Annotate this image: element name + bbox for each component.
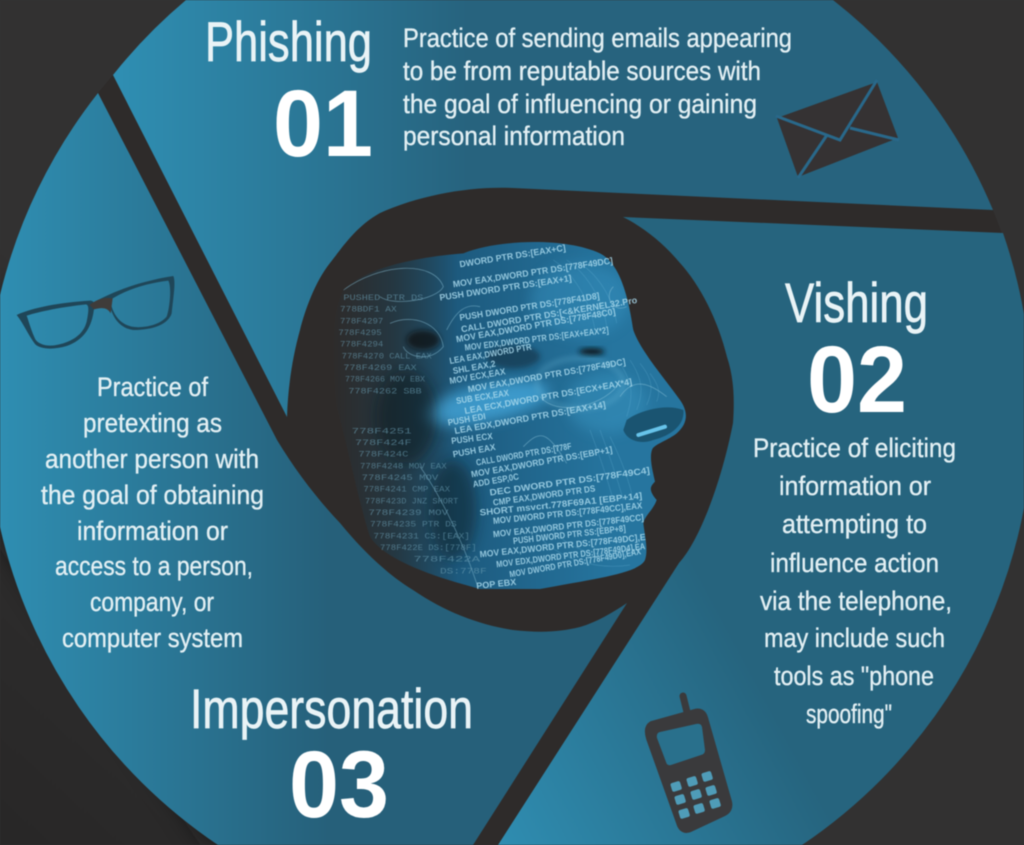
icon: mobile phone bbox=[649, 696, 728, 829]
number: 01: 01 bbox=[273, 71, 373, 177]
text block: vishing description: may include such bbox=[764, 623, 945, 653]
code text overlay: MOV EAX,DWORD PTR DS:[778F48C0] bbox=[455, 306, 616, 344]
dim code on back of head: 778F4235 PTR DS bbox=[370, 520, 457, 530]
dim code on back of head: 778F4294 bbox=[340, 340, 383, 350]
code text overlay: SHORT msvcrt.778F69A1 [EBP+14] bbox=[479, 491, 643, 518]
text block: impersonation description: computer system bbox=[62, 623, 243, 653]
dim code on back of head: 778F4295 bbox=[338, 328, 382, 338]
code text overlay: MOV EAX,DWORD PTR DS:[778F49DC] bbox=[452, 256, 614, 289]
panel: phishing blade bbox=[113, 0, 993, 417]
code text overlay: PUSH DWORD PTR SS:[EBP+8] bbox=[512, 523, 626, 546]
code text overlay: SHL EAX,2 bbox=[452, 359, 496, 376]
text block: phishing description: Practice of sending emails appearing bbox=[403, 23, 792, 53]
text block: impersonation description: company, or bbox=[90, 587, 214, 617]
code text overlay: MOV EAX,DWORD PTR DS:[778F49DC] bbox=[467, 357, 626, 394]
code text overlay: PUSH EAX bbox=[452, 442, 496, 459]
dim code on back of head: 778F4269 EAX bbox=[343, 363, 417, 373]
image: face with code overlay bbox=[338, 242, 686, 590]
text block: impersonation description: pretexting as bbox=[83, 408, 222, 438]
code text overlay: LEA EAX,DWORD PTR bbox=[449, 342, 533, 366]
code text overlay: CALL DWORD PTR DS:[778F bbox=[475, 441, 573, 468]
panel: vishing blade bbox=[498, 217, 1024, 845]
dim code on back of head: DS:778F bbox=[440, 566, 487, 576]
dim code on back of head: 778F424C bbox=[358, 450, 408, 460]
dim code on back of head: PUSHED PTR DS bbox=[343, 293, 423, 303]
dim code on back of head: 778F4248 MOV EAX bbox=[360, 461, 447, 471]
code text overlay: LEA EDX,DWORD PTR DS:[EAX+14] bbox=[454, 399, 606, 436]
dim code on back of head: 778F422A bbox=[413, 555, 480, 565]
code text overlay: POP EBX bbox=[476, 577, 517, 591]
code text overlay: DWORD PTR DS:[EAX+C] bbox=[459, 243, 566, 269]
dim code on back of head: 778F4251 bbox=[352, 426, 412, 436]
code text overlay: MOV ECX,EAX bbox=[449, 366, 506, 386]
heading: Vishing: Vishing bbox=[785, 271, 928, 334]
dim code on back of head: 778BDF1 AX bbox=[340, 305, 397, 315]
text block: vishing description: information or bbox=[779, 471, 931, 501]
code text overlay: ADD ESP,0C bbox=[472, 471, 520, 489]
code text overlay: LEA ECX,DWORD PTR DS:[ECX+EAX*4] bbox=[464, 377, 633, 416]
text block: vishing description: Practice of eliciting bbox=[753, 433, 956, 463]
text block: vishing description: attempting to bbox=[782, 509, 927, 539]
dim code on back of head: 778F423D JNZ SHORT bbox=[365, 496, 458, 506]
text block: impersonation description: Practice of bbox=[97, 372, 208, 402]
dim code on back of head: 778F4239 MOV bbox=[368, 508, 448, 518]
text block: vishing description: spoofing" bbox=[806, 699, 892, 729]
code text overlay: PUSH DWORD PTR DS:[778F41D8] bbox=[459, 291, 600, 323]
text block: vishing description: via the telephone, bbox=[760, 586, 952, 616]
code text overlay: MOV EAX,DWORD PTR DS:[778F49DC],E bbox=[479, 532, 646, 559]
text block: impersonation description: information or bbox=[77, 516, 228, 546]
code text overlay: MOV EDX,DWORD PTR DS:[EAX+EAX*2] bbox=[464, 325, 609, 353]
code text overlay: MOV DWORD PTR DS:[778F49D0],EAX bbox=[509, 546, 642, 579]
dim code on back of head bbox=[338, 293, 487, 576]
text block: phishing description: the goal of influencing or gaining bbox=[403, 89, 757, 119]
text block: impersonation description: the goal of obtaining bbox=[41, 480, 264, 510]
icon: envelope bbox=[776, 80, 899, 178]
dim code on back of head: 778F422E DS:[778F] bbox=[380, 543, 477, 553]
dim code on back of head: 778F4266 MOV EBX bbox=[345, 375, 425, 385]
text block: vishing description: tools as "phone bbox=[774, 661, 934, 691]
text block: phishing description bbox=[403, 23, 792, 151]
text block: phishing description: personal information bbox=[403, 121, 625, 151]
dim code on back of head: 778F4262 SBB bbox=[348, 386, 422, 396]
text block: phishing description: to be from reputable sources with bbox=[403, 56, 761, 86]
text block: impersonation description: access to a person, bbox=[55, 551, 253, 581]
dim code on back of head: 778F4245 MOV bbox=[362, 473, 438, 483]
text block: vishing description bbox=[753, 433, 956, 729]
code text overlay: MOV DWORD PTR DS:[778F49CC],EAX bbox=[492, 500, 643, 526]
code text overlay bbox=[439, 243, 650, 591]
code text overlay: CALL DWORD PTR DS:[<&KERNEL32.Pro bbox=[460, 295, 638, 334]
code text overlay: MOV EDX,DWORD PTR DS:[778F49D4],EA bbox=[496, 541, 646, 569]
dim code on back of head: 778F4297 bbox=[340, 316, 383, 326]
dim code on back of head: 778F4231 CS:[EAX] bbox=[373, 531, 470, 541]
heading: Phishing: Phishing bbox=[205, 10, 372, 73]
text block: vishing description: influence action bbox=[770, 548, 939, 578]
code text overlay: MOV EAX,DWORD PTR DS:[778F49CC] bbox=[492, 512, 644, 539]
dim code on back of head: 778F4270 CALL EAX bbox=[342, 351, 432, 361]
number: 03: 03 bbox=[289, 732, 389, 838]
text block: impersonation description bbox=[41, 372, 264, 653]
dim code on back of head: 778F4241 CMP EAX bbox=[363, 485, 450, 495]
code text overlay: DEC DWORD PTR DS:[778F49C4] bbox=[489, 465, 650, 498]
code text overlay: MOV EAX,DWORD PTR DS:[EBP+1] bbox=[470, 445, 613, 479]
code text overlay: PUSH DWORD PTR DS:[EAX+1] bbox=[439, 273, 572, 303]
text block: impersonation description: another person with bbox=[45, 444, 259, 474]
code text overlay: CMP EAX,DWORD PTR DS bbox=[492, 483, 596, 508]
icon: glasses bbox=[17, 276, 174, 349]
code text overlay: SUB ECX,EAX bbox=[455, 388, 510, 406]
code text overlay: PUSH EDI bbox=[447, 411, 486, 428]
number: 02: 02 bbox=[807, 327, 907, 433]
panel: impersonation blade bbox=[0, 93, 627, 845]
heading: Impersonation: Impersonation bbox=[190, 677, 473, 740]
dim code on back of head: 778F424F bbox=[355, 438, 412, 448]
code text overlay: PUSH ECX bbox=[451, 431, 493, 446]
